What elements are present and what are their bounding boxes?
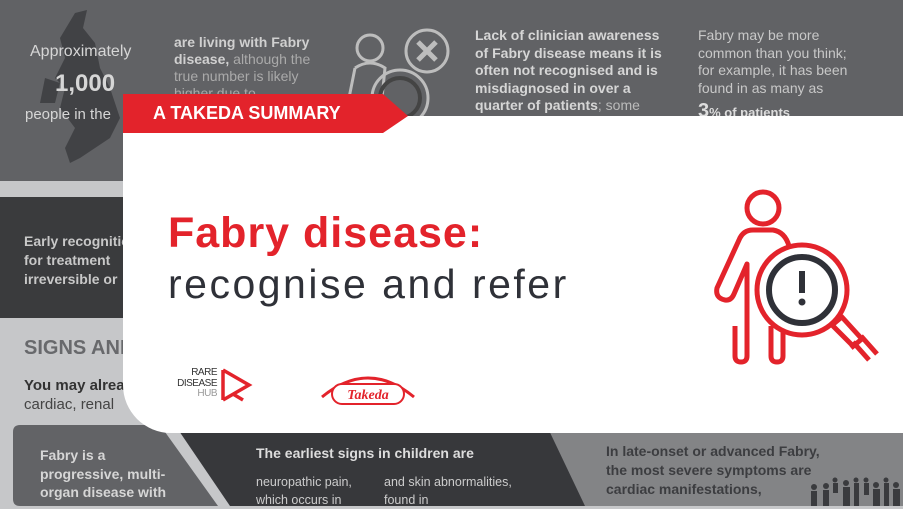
text: more common: for example, it has been xyxy=(698,62,847,78)
text: more common xyxy=(698,27,847,96)
text: more common: common than you think; xyxy=(698,44,847,60)
logo: rare disease hub xyxy=(177,367,252,402)
text: living with Fabry: disease, although the xyxy=(174,51,310,67)
heading: signs and symptoms: SIGNS AND xyxy=(24,337,134,359)
bottom panels: neuropathic pain, xyxy=(256,475,352,489)
text: you may already: cardiac, renal xyxy=(24,396,114,413)
icon: people crowd xyxy=(811,478,900,506)
text: approximately 1,000: Approximately xyxy=(30,43,131,60)
red tab: a takeda summary: A TAKEDA SUMMARY xyxy=(153,103,341,123)
text: living with Fabry: are living with Fabry xyxy=(174,34,309,50)
title xyxy=(168,209,569,307)
top background band: 3% of patients xyxy=(698,100,790,122)
text: clinician awareness: of Fabry disease means it is xyxy=(475,44,662,60)
logo: rare disease hub: HUB xyxy=(197,388,217,399)
text: you may already: You may already xyxy=(24,377,142,394)
icon: grey person with x xyxy=(348,28,450,116)
text: late-onset: the most severe symptoms are xyxy=(606,462,811,478)
bottom panels xyxy=(13,425,903,507)
text: late-onset: cardiac manifestations, xyxy=(606,481,762,497)
text: more common: Fabry may be more xyxy=(698,27,819,43)
text: living with Fabry xyxy=(174,34,310,101)
logo: takeda xyxy=(321,376,415,405)
bottom panels: which occurs in xyxy=(256,493,341,507)
text: clinician awareness: misdiagnosed in over a xyxy=(475,80,631,96)
text: living with Fabry: higher due to xyxy=(174,85,256,101)
top background band xyxy=(0,0,903,181)
top background band: people in the xyxy=(25,106,111,123)
map silhouette xyxy=(40,10,120,163)
text: clinician awareness: quarter of patients; some xyxy=(475,97,640,113)
logo: rare disease hub: DISEASE xyxy=(177,378,217,388)
text: earliest signs: The earliest signs in children are xyxy=(256,445,474,461)
text: early recognition xyxy=(24,233,138,287)
bottom panels: Fabry is a xyxy=(40,447,105,463)
text: clinician awareness: often not recognised and is xyxy=(475,62,658,78)
top background band: 1,000 xyxy=(55,70,115,97)
text: more common: found in as many as xyxy=(698,80,823,96)
text: late-onset: In late-onset or advanced Fabry, xyxy=(606,443,820,459)
white card xyxy=(123,116,903,433)
text: late-onset xyxy=(606,443,820,497)
bottom panels: and skin abnormalities, xyxy=(384,475,512,489)
bottom panels: progressive, multi- xyxy=(40,466,165,482)
text: living with Fabry: true number is likely xyxy=(174,68,298,84)
dark band xyxy=(0,197,903,318)
text: early recognition: irreversible or xyxy=(24,271,117,287)
icon: person with magnifier xyxy=(714,190,879,364)
text: you may already xyxy=(24,377,142,413)
red tab: a takeda summary xyxy=(123,94,408,133)
logo: takeda: Takeda xyxy=(347,388,389,403)
text: early recognition: Early recognition xyxy=(24,233,138,249)
panel: fabry progressive xyxy=(13,425,903,506)
bottom panels: organ disease with xyxy=(40,484,166,500)
text: clinician awareness xyxy=(475,27,662,113)
text: early recognition: for treatment xyxy=(24,252,110,268)
title: recognise and refer xyxy=(168,261,569,307)
logo: rare disease hub: RARE xyxy=(191,367,217,378)
text: clinician awareness: Lack of clinician awareness xyxy=(475,27,659,43)
title: Fabry disease: xyxy=(168,209,483,257)
bottom panels: found in xyxy=(384,493,428,507)
